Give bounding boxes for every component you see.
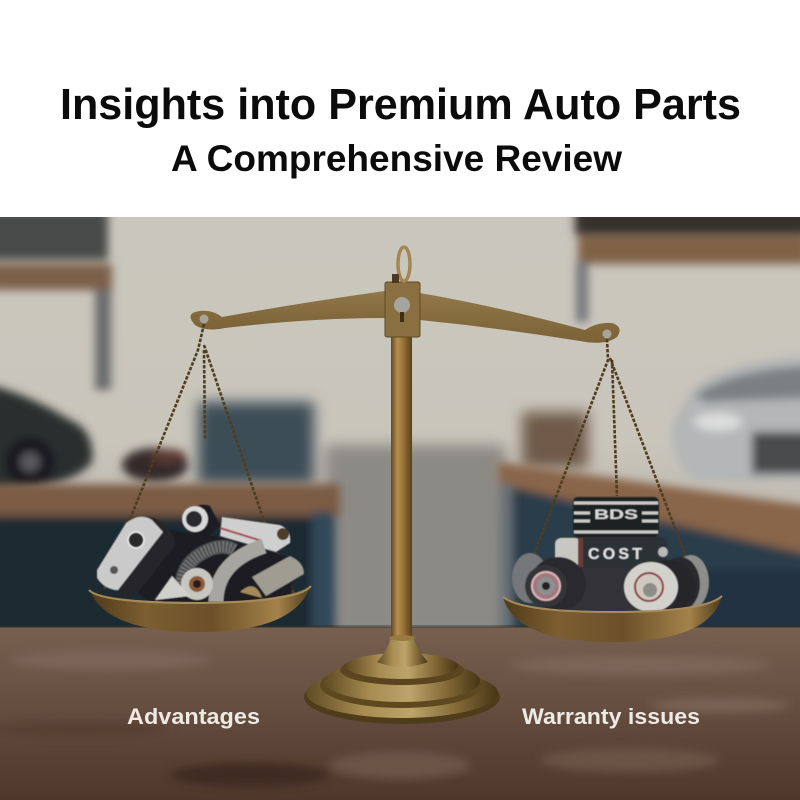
pivot bolt [394,297,410,313]
steel pipe [216,546,264,602]
dark mass [135,530,295,602]
label: warranty issues: Warranty issues [522,704,700,729]
left pan [89,585,311,632]
title: Insights into Premium Auto Parts [60,80,741,129]
left bench [0,484,340,636]
corrugated hose [182,547,234,594]
label: advantages: Advantages [127,704,260,729]
beam left [190,291,385,329]
housing [97,517,175,597]
small bush [181,568,213,600]
base [304,635,500,724]
bolt [252,556,304,596]
cost cylinder: COST [588,546,642,563]
back right roller [673,555,709,609]
blurred car right [671,356,800,480]
left parts pile [97,505,304,602]
stacked disc [573,497,659,537]
chrome cylinder [220,517,290,552]
blurred car left [0,385,188,490]
subtitle: A Comprehensive Review [171,138,622,179]
scale beam [190,247,620,343]
right parts pile [512,497,709,612]
right wheel [624,560,696,612]
beam right [420,293,620,343]
back left roller [512,553,548,603]
pole [391,335,412,640]
title block background [0,0,800,217]
centre block [385,282,420,337]
right bench [498,462,800,640]
scale stand [304,335,500,724]
left chains [104,324,294,594]
right chains [516,339,696,602]
photo background: workshop [0,205,800,640]
right pan [503,596,722,642]
left wheel [525,557,586,611]
ribbed middle [570,566,640,610]
ring part [182,505,220,545]
cost cylinder [555,537,668,568]
top ring [398,247,410,281]
wooden table [0,625,800,800]
stacked disc: BDS [594,506,638,522]
